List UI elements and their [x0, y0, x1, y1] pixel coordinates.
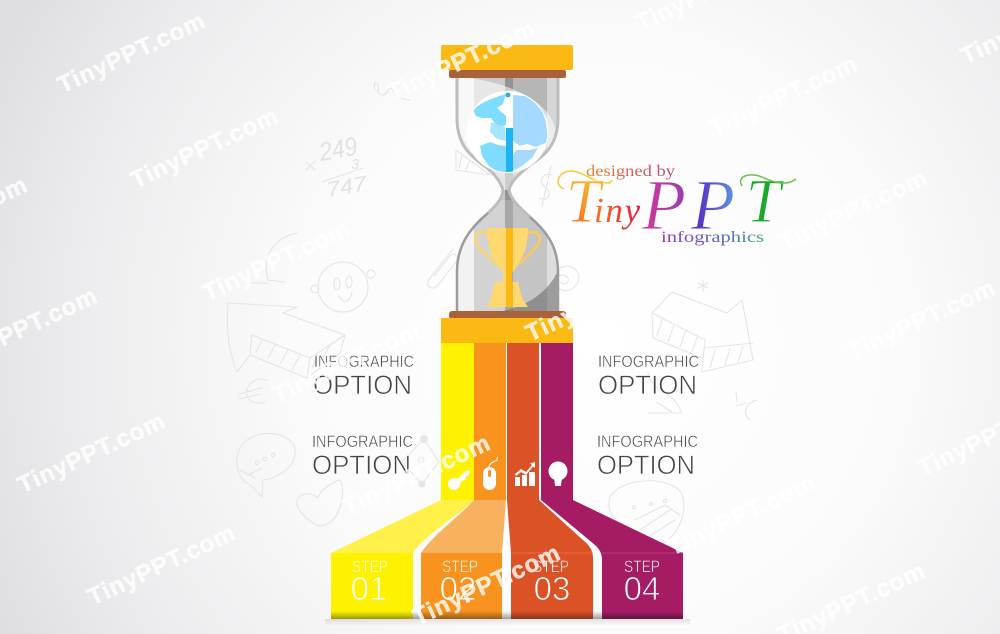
- text: option 1 left: [313, 353, 414, 400]
- doodle: star: [698, 280, 708, 291]
- icon: key: [448, 470, 470, 490]
- doodle: small hourglass: [648, 372, 682, 413]
- doodle: cylinder bubble: [609, 481, 684, 545]
- text: option 2 left: INFOGRAPHIC: [312, 433, 413, 451]
- text: option 1 left: INFOGRAPHIC: [314, 353, 414, 371]
- watermarks: TinyPPT.com: [339, 429, 495, 521]
- doodle: multiplication sum: 747: [325, 172, 370, 202]
- watermarks: TinyPPT.com: [199, 215, 355, 307]
- doodle: multiplication sum: 3: [351, 156, 360, 173]
- right land masses: [513, 95, 548, 147]
- icon: growth chart: [515, 462, 535, 486]
- logo: designed by TinyPPT infographics: P: [641, 165, 686, 245]
- ribbon bottom shadow: [331, 611, 683, 619]
- trophy: [475, 228, 540, 307]
- doodle: dollar sign: [539, 166, 552, 206]
- text: option 1 right: INFOGRAPHIC: [598, 353, 699, 371]
- step 01 label: 01: [351, 570, 387, 607]
- doodle: left 3D arrow: [227, 303, 345, 378]
- text: option 2 left: OPTION: [312, 450, 411, 480]
- text: option 2 right: [597, 433, 698, 480]
- text: option 2 right: INFOGRAPHIC: [597, 433, 698, 451]
- watermarks: TinyPPT.com: [522, 255, 678, 347]
- watermarks: TinyPPT.com: [664, 469, 820, 561]
- watermarks: TinyPPT.com: [384, 15, 540, 107]
- upper highlight: [457, 78, 556, 190]
- step 02 label: 02: [440, 570, 476, 607]
- step 02 label: STEP: [442, 558, 478, 576]
- step 02 ribbon: [421, 343, 506, 619]
- doodle: right 3D arrow: [652, 292, 753, 372]
- step 04 ribbon: [541, 343, 683, 619]
- top cap: [441, 45, 573, 70]
- bottom brown collar: [449, 311, 566, 319]
- watermarks: TinyPPT.com: [706, 50, 862, 142]
- logo: designed by TinyPPT infographics: P: [690, 165, 735, 245]
- doodle: sad face: [736, 392, 757, 420]
- doodle: pencil shape: [456, 150, 490, 175]
- logo: designed by TinyPPT infographics: iny: [594, 191, 640, 230]
- watermarks: TinyPPT.com: [409, 539, 565, 631]
- background doodles: [227, 83, 757, 545]
- doodle: euro sign: [239, 379, 267, 403]
- doodle: scribble: [374, 83, 410, 100]
- doodle: speech bubble: [237, 434, 295, 497]
- step 03 label: 03: [534, 570, 570, 607]
- watermarks: TinyPPT.com: [54, 7, 210, 99]
- meridian strip: [506, 128, 513, 172]
- doodle: paperclip: [428, 249, 457, 288]
- icon: light bulb: [548, 462, 568, 486]
- glass outline lower: [457, 213, 558, 311]
- bottom cap: [441, 318, 573, 343]
- hourglass: [441, 45, 573, 343]
- doodle: multiplication sum: 249: [316, 131, 359, 167]
- logo: designed by TinyPPT infographics: T: [566, 168, 605, 236]
- ground shadow: [325, 619, 690, 626]
- watermarks: TinyPPT.com: [14, 407, 170, 499]
- step 04 label: STEP: [624, 558, 660, 576]
- watermarks: TinyPPT.com: [127, 102, 283, 194]
- doodle: heart: [297, 480, 343, 526]
- glass outline: [457, 78, 558, 217]
- text: option 2 left: [312, 433, 413, 480]
- logo: designed by TinyPPT infographics: infographics: [661, 229, 764, 246]
- step 03 label: STEP: [533, 558, 569, 576]
- lower right dark zone: [503, 270, 558, 311]
- doodle: spiral: [556, 266, 579, 291]
- top brown collar: [449, 70, 566, 78]
- logo: designed by TinyPPT infographics: designed by: [586, 163, 675, 180]
- doodle: curved arrow: [250, 233, 297, 283]
- watermarks: TinyPPT.com: [776, 164, 932, 256]
- text: option 1 right: OPTION: [598, 370, 697, 400]
- glass body with stripes: [457, 78, 558, 311]
- globe: [466, 91, 548, 173]
- step 01 label: STEP: [352, 558, 388, 576]
- step 04 label: 04: [624, 570, 660, 607]
- watermarks: TinyPPT.com: [844, 274, 1000, 366]
- icon: mouse: [483, 457, 497, 490]
- text: option 1 right: [598, 353, 699, 400]
- step 03 ribbon: [507, 343, 593, 619]
- logo: designed by TinyPPT infographics: T: [746, 168, 785, 236]
- text: option 1 left: OPTION: [313, 370, 412, 400]
- left land masses: [473, 94, 506, 128]
- step 01 ribbon: [331, 343, 474, 619]
- doodle: smiley face: [311, 262, 375, 312]
- lower highlight: [474, 200, 547, 311]
- text: option 2 right: OPTION: [597, 450, 695, 480]
- watermarks: TinyPPT.com: [269, 317, 425, 409]
- doodle: multiplication sum: [306, 131, 370, 202]
- doodle: network: [402, 436, 439, 487]
- watermarks: TinyPPT.com: [84, 519, 240, 611]
- logo: designed by TinyPPT infographics: [558, 163, 796, 246]
